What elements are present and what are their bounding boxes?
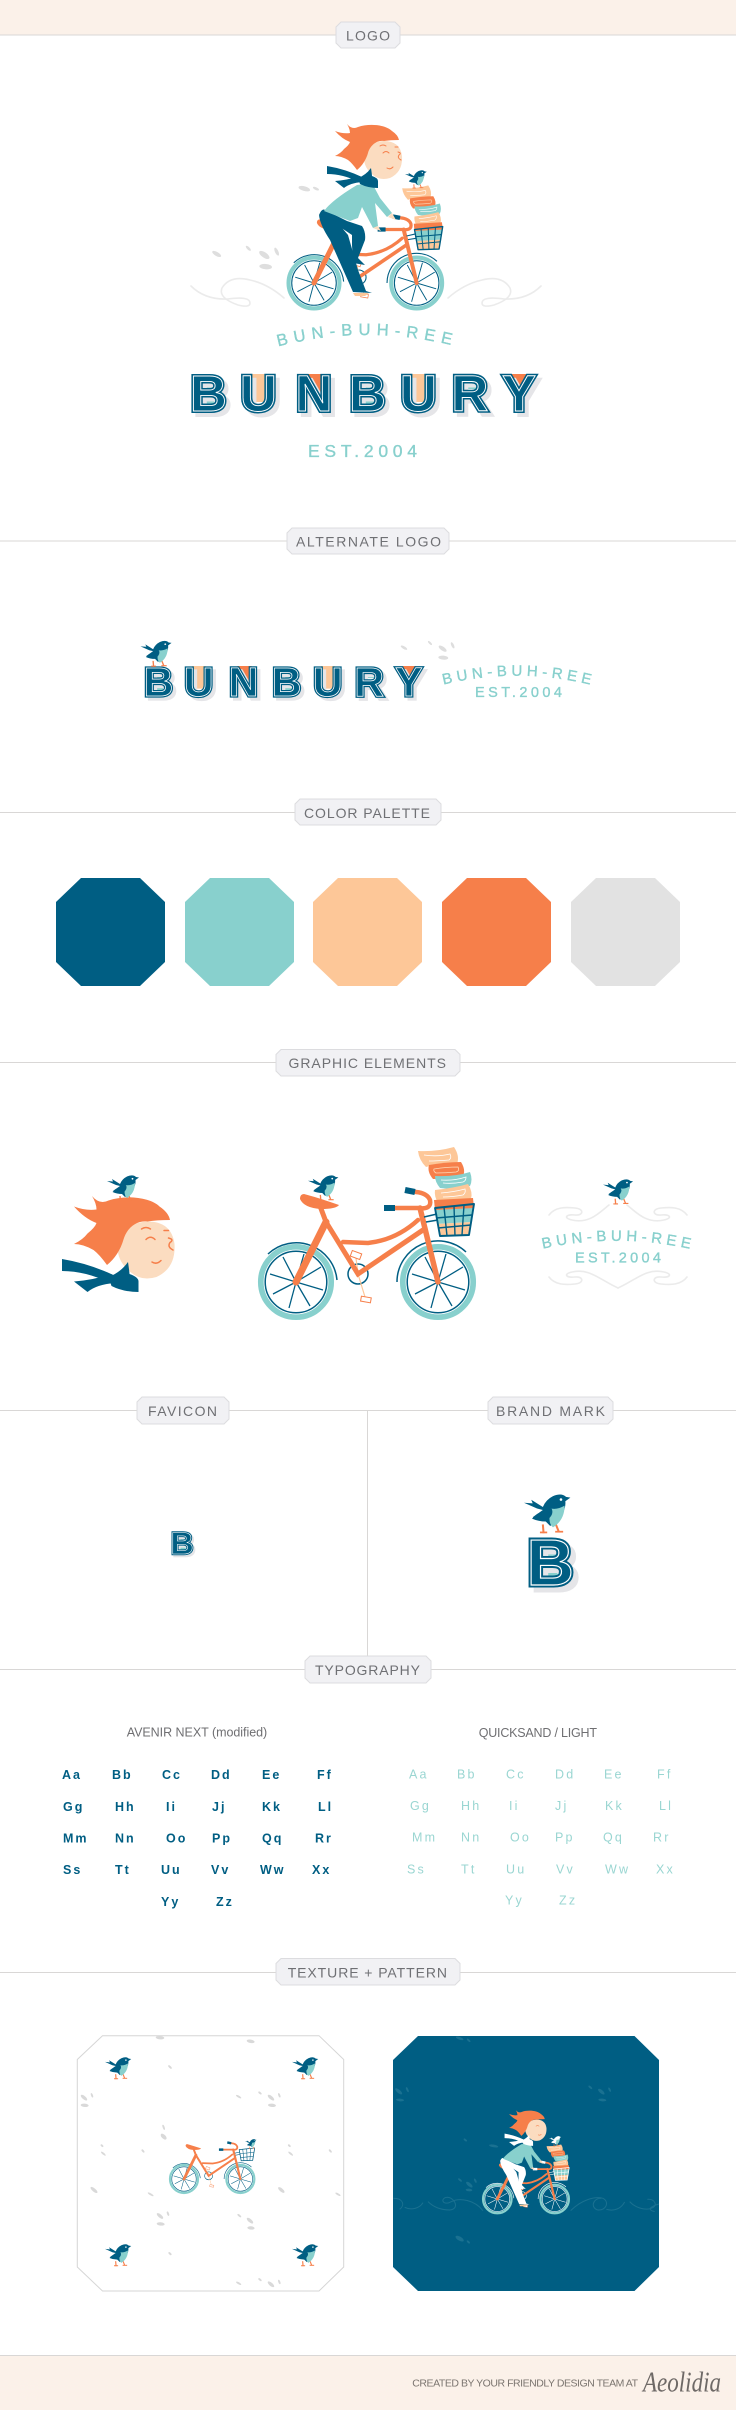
alphabet: avenir next: Xx (312, 1863, 331, 1877)
panel: navy pattern (393, 2036, 659, 2291)
color palette swatches (56, 878, 680, 986)
panel: alternate logo (140, 640, 592, 708)
alphabet: avenir next: Bb (112, 1768, 133, 1782)
alphabet: avenir next: Nn (115, 1832, 136, 1846)
alphabet: quicksand: Pp (555, 1830, 575, 1844)
logo leaves (211, 185, 320, 270)
alphabet: avenir next: Oo (166, 1832, 187, 1846)
section tag: color palette: COLOR PALETTE (304, 805, 430, 821)
heading: avenir next: AVENIR NEXT (modified) (127, 1726, 267, 1740)
alternate pronunciation: BUN-BUH-REE (442, 665, 592, 685)
alphabet: avenir next: Qq (262, 1832, 283, 1846)
swatch: peach (313, 878, 422, 986)
alphabet: avenir next: Ww (260, 1863, 286, 1877)
alphabet: avenir next: Vv (211, 1863, 230, 1877)
panel: typography (62, 1726, 675, 1909)
alphabet: quicksand: Jj (555, 1799, 568, 1813)
badge bird (603, 1179, 633, 1204)
alphabet: quicksand: Dd (555, 1768, 575, 1782)
alphabet: avenir next: Yy (161, 1895, 180, 1909)
horizontal wordmark: BUNBURY (144, 659, 423, 705)
alphabet: quicksand: Ww (605, 1862, 630, 1876)
alphabet: quicksand: Yy (505, 1894, 524, 1908)
section tag: alternate logo: ALTERNATE LOGO (296, 534, 441, 550)
alphabet: quicksand: Ff (657, 1768, 673, 1782)
pronunciation text: BUN-BUH-REE (276, 324, 453, 346)
illustration: girl on bicycle (289, 124, 443, 308)
swatch: orange (442, 878, 551, 986)
panel: primary logo (190, 124, 542, 461)
horizontal wordmark: BUNBURY (147, 662, 426, 708)
panel: graphic elements (62, 1147, 692, 1320)
badge pronunciation: BUN-BUH-REE (542, 1230, 692, 1249)
swatch: navy (56, 878, 165, 986)
swatch: teal (185, 878, 294, 986)
alphabet: quicksand: Zz (559, 1894, 577, 1908)
icon: bird on B (140, 641, 172, 667)
section tag: graphic elements: GRAPHIC ELEMENTS (288, 1055, 446, 1071)
alphabet: avenir next: Mm (63, 1832, 89, 1846)
alphabet: quicksand: Ss (407, 1862, 426, 1876)
alphabet: quicksand: Ii (509, 1799, 520, 1813)
alphabet: avenir next: Ee (262, 1768, 281, 1782)
alphabet: quicksand: Cc (506, 1768, 526, 1782)
footer credit text: CREATED BY YOUR FRIENDLY DESIGN TEAM AT (412, 2378, 639, 2390)
badge date: EST.2004 (575, 1250, 661, 1266)
element: bicycle with buns (261, 1147, 474, 1317)
alphabet: quicksand: Oo (510, 1830, 531, 1844)
alphabet: quicksand: Xx (656, 1862, 675, 1876)
alphabet: quicksand: Ll (659, 1799, 673, 1813)
alphabet: avenir next: Rr (315, 1832, 333, 1846)
alternate leaves (400, 640, 455, 660)
light pattern leaves (80, 2036, 341, 2288)
logo swirls (191, 279, 541, 306)
section tag: graphic elements (276, 1050, 460, 1076)
section tag: brand mark: BRAND MARK (496, 1403, 606, 1419)
section tag: favicon: FAVICON (148, 1403, 217, 1419)
alphabet: avenir next: Jj (212, 1800, 226, 1814)
alphabet: avenir next: Hh (115, 1800, 136, 1814)
alphabet: quicksand: Tt (461, 1862, 477, 1876)
element: girl head with bird (62, 1175, 175, 1292)
favicon mark: B (171, 1525, 194, 1561)
alphabet: quicksand: Hh (461, 1799, 481, 1813)
section tag: typography: TYPOGRAPHY (315, 1662, 421, 1678)
swatch: gray (571, 878, 680, 986)
section tag: texture and pattern (276, 1958, 460, 1985)
brand mark bird (524, 1495, 570, 1533)
navy pattern illustration (483, 2110, 569, 2213)
alphabet: quicksand: Vv (556, 1862, 575, 1876)
brand mark (524, 1495, 579, 1604)
alphabet: quicksand: Nn (461, 1830, 481, 1844)
pattern bicycle (170, 2139, 257, 2193)
alternate date: EST.2004 (475, 685, 562, 701)
navy pattern leaves and swirls (393, 2036, 659, 2244)
favicon mark: B (171, 1525, 194, 1561)
badge swirls (549, 1205, 687, 1288)
alphabet: avenir next: Ss (63, 1863, 82, 1877)
pattern birds (105, 2057, 318, 2266)
wordmark: BUNBURY (194, 369, 540, 426)
alphabet: quicksand: Mm (412, 1830, 437, 1844)
light pattern frame (77, 2036, 344, 2291)
alphabet: avenir next: Kk (262, 1800, 282, 1814)
top band (0, 0, 736, 35)
established date: EST.2004 (308, 441, 417, 461)
section tag: logo (336, 22, 400, 48)
alphabet: avenir next: Ll (318, 1800, 333, 1814)
alphabet: avenir next: Ii (166, 1800, 177, 1814)
alphabet: avenir next: Tt (115, 1863, 131, 1877)
alphabet: quicksand: Bb (457, 1768, 477, 1782)
heading: quicksand: QUICKSAND / LIGHT (479, 1726, 597, 1740)
alphabet: avenir next (62, 1768, 333, 1909)
alphabet: quicksand: Rr (653, 1830, 671, 1844)
alphabet: quicksand: Gg (410, 1799, 431, 1813)
alphabet: quicksand: Ee (604, 1768, 624, 1782)
alphabet: avenir next: Cc (162, 1768, 182, 1782)
wordmark: BUNBURY (190, 365, 536, 422)
alphabet: quicksand (407, 1768, 675, 1908)
alphabet: avenir next: Dd (211, 1768, 232, 1782)
brand mark letter: B (532, 1531, 579, 1604)
panel: light pattern (77, 2036, 344, 2291)
horizontal wordmark: BUNBURY (144, 659, 423, 705)
wordmark: BUNBURY (190, 365, 536, 422)
alphabet: quicksand: Aa (409, 1768, 429, 1782)
footer band (0, 2355, 736, 2410)
section tag: typography (305, 1656, 431, 1683)
alphabet: avenir next: Uu (161, 1863, 182, 1877)
section tag: alternate logo (287, 528, 449, 554)
section tag: logo: LOGO (346, 28, 390, 44)
section tag: color palette (295, 799, 441, 825)
section tag: brand mark (488, 1397, 613, 1424)
section tag: texture and pattern: TEXTURE + PATTERN (288, 1964, 447, 1980)
favicon mark: B (173, 1527, 196, 1563)
alphabet: avenir next: Aa (62, 1768, 82, 1782)
alphabet: avenir next: Gg (63, 1800, 84, 1814)
navy pattern background (393, 2036, 659, 2291)
alphabet: avenir next: Zz (216, 1895, 234, 1909)
alphabet: avenir next: Ff (317, 1768, 333, 1782)
alphabet: avenir next: Pp (212, 1832, 232, 1846)
brand mark letter: B (527, 1526, 574, 1599)
alphabet: quicksand: Qq (603, 1830, 624, 1844)
alphabet: quicksand: Kk (605, 1799, 624, 1813)
brand mark letter: B (527, 1526, 574, 1599)
alphabet: quicksand: Uu (506, 1862, 526, 1876)
section tag: favicon (137, 1397, 229, 1424)
element: badge (542, 1179, 692, 1289)
